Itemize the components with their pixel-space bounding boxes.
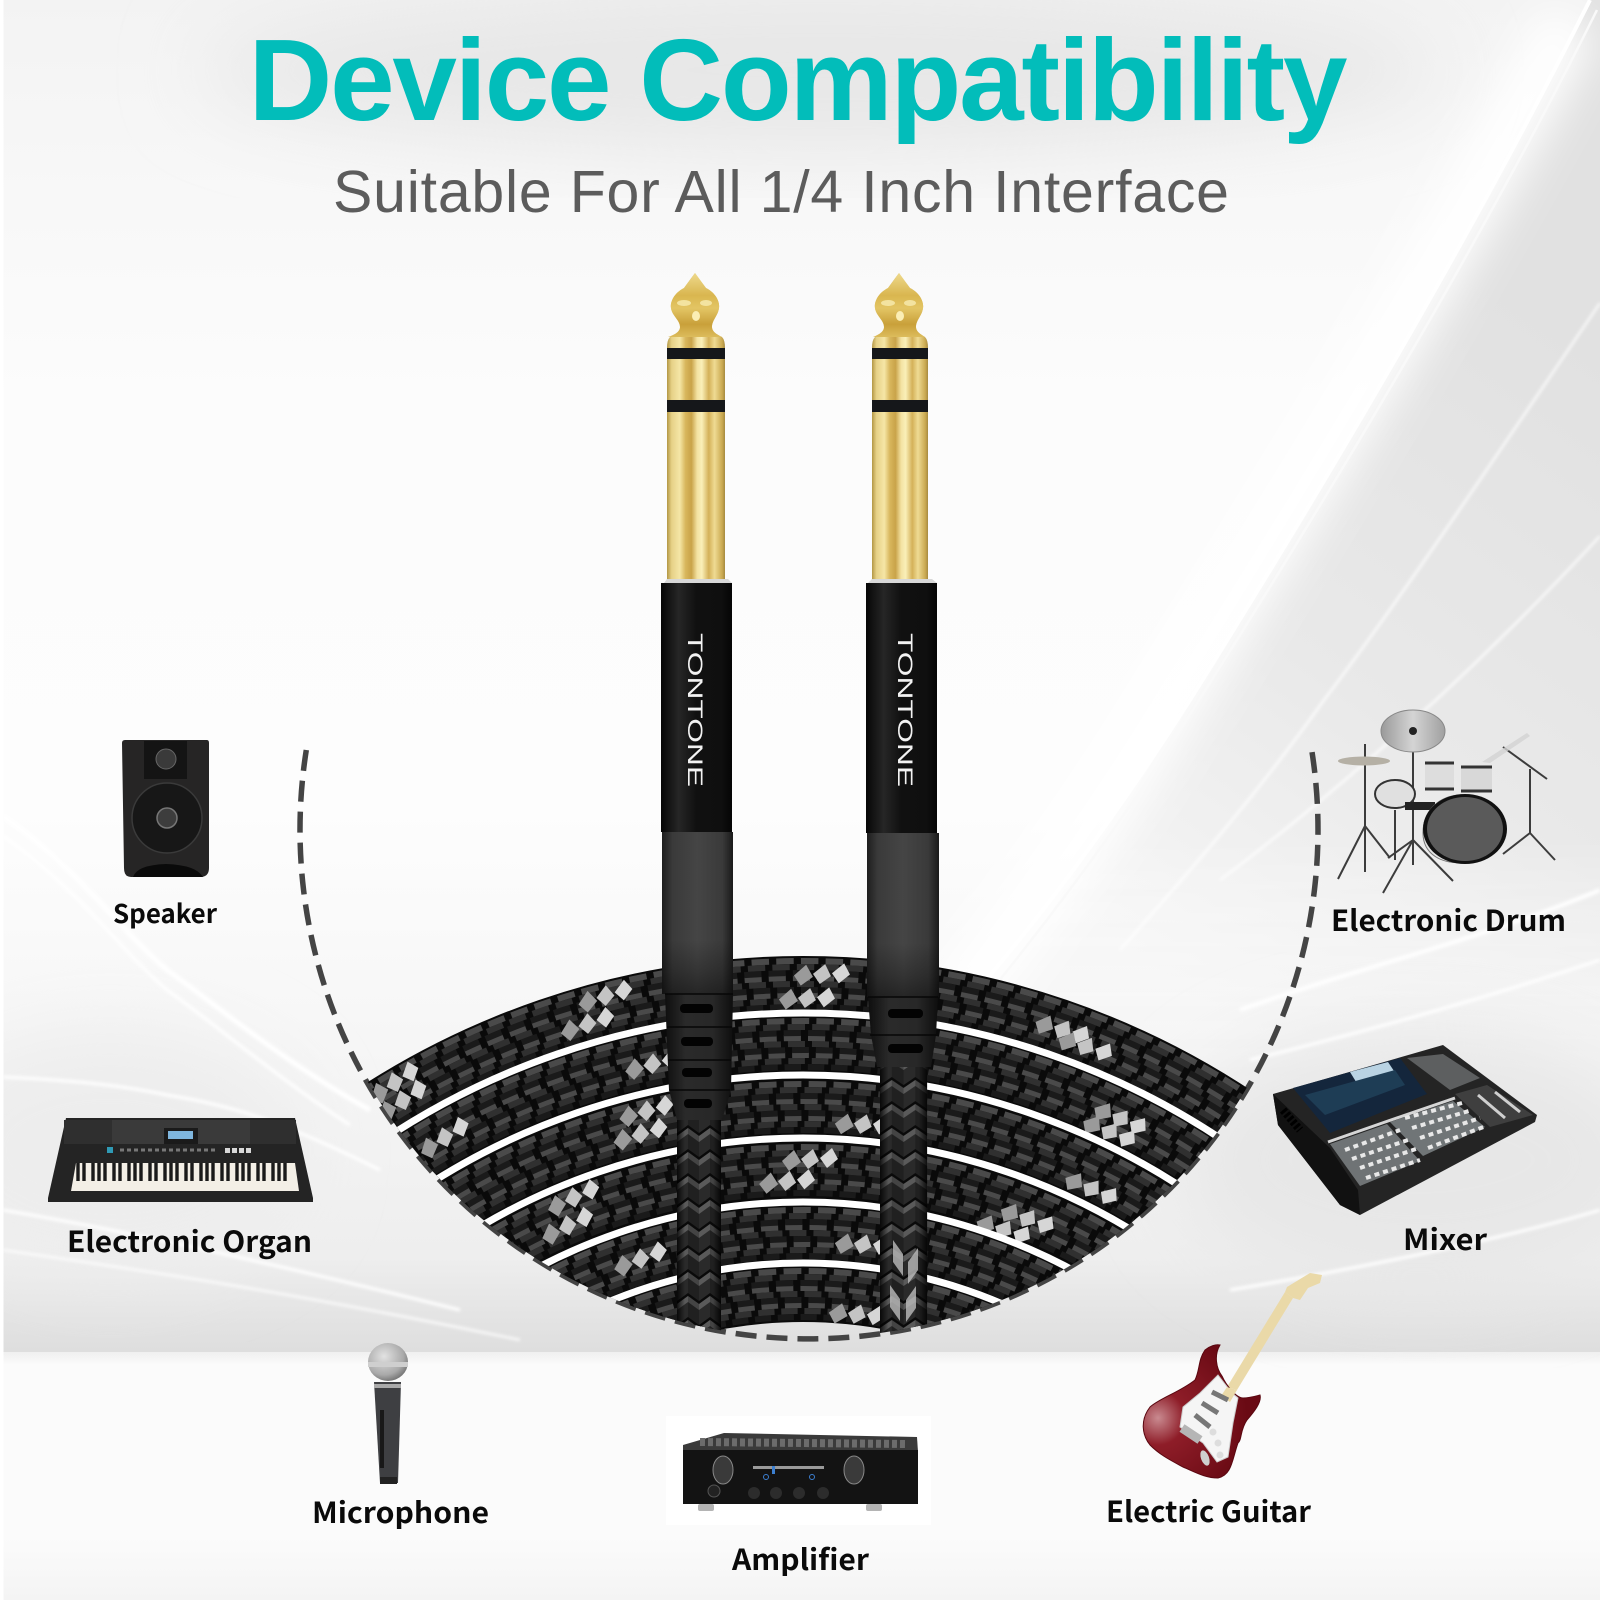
device: speaker [113,740,218,931]
label: Mixer: Mixer [1403,1217,1487,1259]
icon: drum kit [1338,710,1555,893]
label: Microphone: Microphone [312,1490,489,1532]
right strain relief [868,997,938,1067]
right braided cable [880,1062,927,1340]
label: Amplifier: Amplifier [731,1537,869,1579]
icon: microphone [368,1343,408,1484]
right brand text: TONTONE [893,633,916,787]
device: amplifier [666,1416,931,1579]
dashed circle arc [300,750,1318,1339]
label: Electric Guitar: Electric Guitar [1106,1489,1311,1531]
device: electronic drum [1331,710,1566,940]
icon: amplifier backdrop [666,1416,931,1525]
left brand text: TONTONE [683,633,706,787]
device: microphone [312,1343,489,1532]
left gold tip [667,273,725,579]
icon: guitar [1143,1273,1322,1478]
right gold tip [872,273,928,579]
label: Speaker: Speaker [113,894,218,931]
icon: amplifier [683,1433,918,1511]
left barrel [661,579,733,994]
left braided cable [677,1115,721,1340]
left strain relief [665,994,733,1120]
right barrel [866,579,939,997]
title: Device Compatibility [248,15,1348,145]
coiled braided cable [368,956,1247,1331]
right plug [866,273,939,1340]
left plug [661,273,733,1340]
device: electronic organ [48,1118,313,1261]
device: electric guitar [1106,1273,1322,1531]
icon: keyboard [48,1118,313,1202]
icon: mixer console [1273,1045,1537,1215]
label: Electronic Organ: Electronic Organ [67,1219,312,1261]
subtitle: Suitable For All 1/4 Inch Interface [333,159,1229,225]
icon: speaker [122,740,209,877]
label: Electronic Drum: Electronic Drum [1331,898,1566,940]
device: mixer [1273,1045,1537,1259]
